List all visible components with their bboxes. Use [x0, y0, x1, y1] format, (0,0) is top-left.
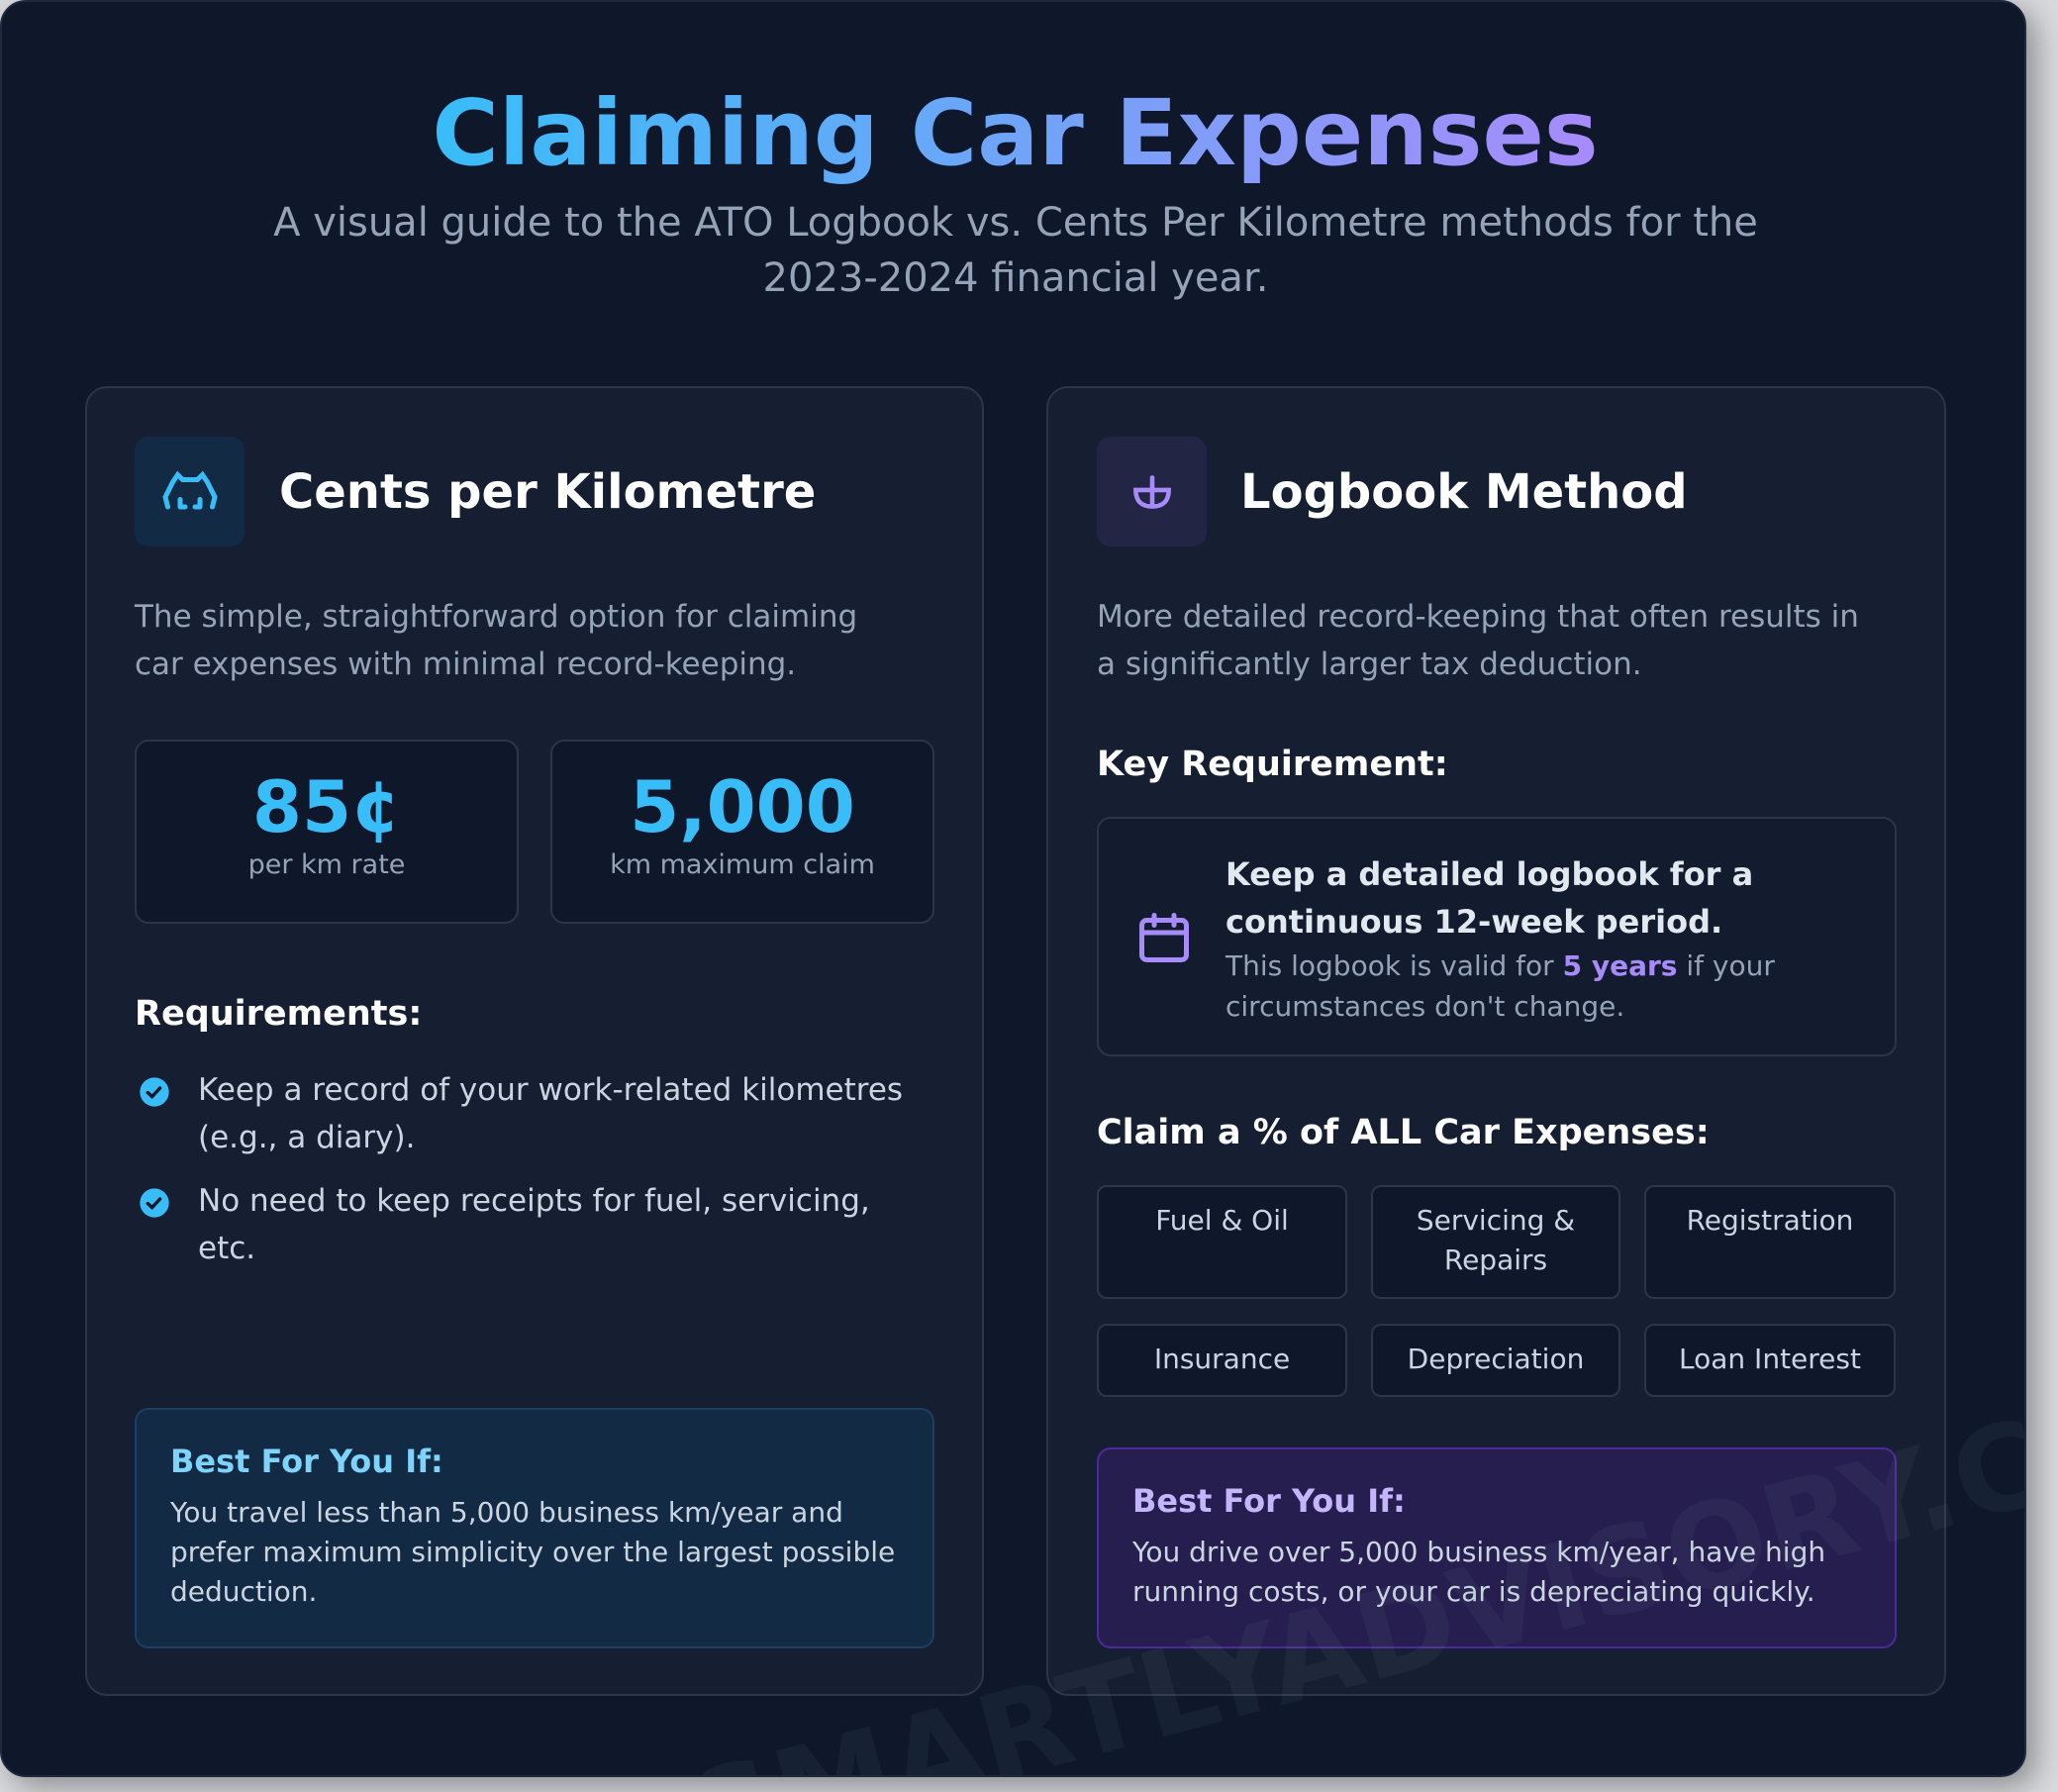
expense chips: Fuel & Oil [1155, 1204, 1289, 1237]
panel: logbook [1046, 386, 1946, 1696]
key requirement heading: Key Requirement: [1097, 745, 1448, 784]
callout: best for: Best For You If: [1132, 1482, 1406, 1520]
callout: best for [135, 1408, 934, 1648]
expense chips: Servicing & [1417, 1204, 1575, 1237]
stat: max km: 5,000 [630, 765, 855, 848]
stat: max km: km maximum claim [610, 849, 875, 880]
stat: rate [135, 740, 519, 924]
callout: best for: You travel less than 5,000 business km/year and prefer maximum simplicity over the largest possible deduction. [170, 1496, 895, 1608]
stat: rate: per km rate [248, 849, 405, 880]
claim heading: Claim a % of ALL Car Expenses: [1097, 1113, 1710, 1152]
callout: best for: You drive over 5,000 business km/year, have high running costs, or your car is depreciating quickly. [1132, 1536, 1825, 1608]
callout: best for [1097, 1447, 1897, 1648]
key requirement box: Keep a detailed logbook for a continuous 12-week period. [1225, 855, 1753, 941]
key requirement box [1097, 817, 1897, 1056]
expense chips [1097, 1185, 1896, 1397]
expense chips: Loan Interest [1679, 1343, 1861, 1375]
icon: car [135, 437, 245, 547]
expense chips: Registration [1687, 1204, 1853, 1237]
heading: Logbook Method [1240, 464, 1688, 520]
callout: best for: Best For You If: [170, 1443, 443, 1480]
icon: book [1097, 437, 1207, 547]
requirement 1: Keep a record of your work-related kilometres (e.g., a diary). [198, 1072, 903, 1155]
subtitle: A visual guide to the ATO Logbook vs. Cents Per Kilometre methods for the 2023-2024 financial year. [273, 200, 1758, 301]
title: Claiming Car Expenses [432, 80, 1599, 186]
stat: max km [550, 740, 934, 924]
expense chips: Repairs [1444, 1244, 1547, 1276]
icon: calendar [1139, 913, 1189, 962]
description: The simple, straightforward option for claiming car expenses with minimal record-keeping. [135, 599, 857, 682]
expense chips: Depreciation [1408, 1343, 1584, 1375]
panel: cents per km [85, 386, 984, 1696]
stat: rate: 85¢ [252, 765, 401, 848]
requirement 2: No need to keep receipts for fuel, servicing, etc. [198, 1183, 870, 1266]
description: More detailed record-keeping that often results in a significantly larger tax deduction. [1097, 599, 1859, 682]
expense chips: Insurance [1154, 1343, 1290, 1375]
requirements heading: Requirements: [135, 994, 422, 1034]
key requirement box: This logbook is valid for 5 years if your circumstances don't change. [1225, 949, 1775, 1023]
heading: Cents per Kilometre [279, 464, 816, 520]
